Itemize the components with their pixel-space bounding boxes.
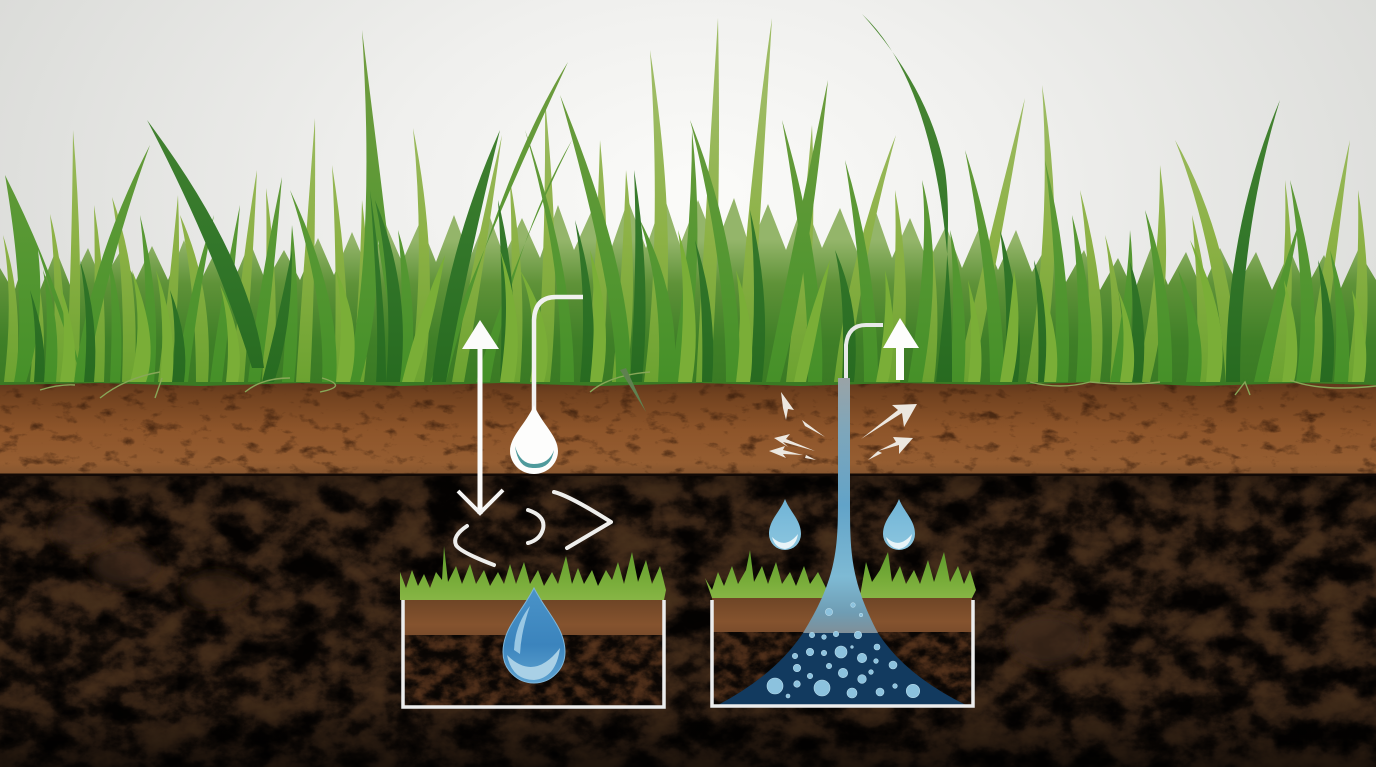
soil boundary line <box>0 474 1376 476</box>
fallen blade <box>620 368 646 412</box>
icon: small water drop left <box>769 499 801 550</box>
icon: white water drop with tube <box>510 297 583 474</box>
panel: mini cross-section infiltration <box>400 546 666 707</box>
arrow: tall white double-headed arrow <box>458 320 503 514</box>
mini grass <box>705 550 976 598</box>
border frame <box>712 600 973 706</box>
arrow: curved flow fragments <box>455 492 611 565</box>
panel: mini cross-section capillary rise <box>705 325 976 706</box>
icon: large blue water drop <box>503 588 565 683</box>
dark lower soil layer <box>0 470 1376 767</box>
back blades, pale <box>3 18 1368 382</box>
brown topsoil band <box>0 375 1376 475</box>
ground runners <box>40 372 1376 398</box>
mid blades <box>5 30 1349 382</box>
mini brown soil <box>404 600 664 635</box>
tube with water and flare <box>803 378 878 633</box>
water cone lower <box>718 633 966 705</box>
mini dark soil <box>712 632 972 706</box>
arrows: dispersal left <box>769 392 825 460</box>
front bright blades <box>60 230 1366 382</box>
tube bent top <box>846 325 883 385</box>
grass mass <box>0 196 1376 386</box>
mini grass <box>400 546 666 600</box>
border frame <box>403 600 664 707</box>
grass field <box>0 14 1376 412</box>
mini brown soil <box>712 598 972 632</box>
arrow: white upward arrow <box>883 318 919 380</box>
water bubbles <box>767 603 920 698</box>
arrows: dispersal right <box>861 404 917 460</box>
dark blades <box>30 14 1334 382</box>
icon: small water drop right <box>883 499 915 550</box>
mini dark soil <box>404 635 664 706</box>
